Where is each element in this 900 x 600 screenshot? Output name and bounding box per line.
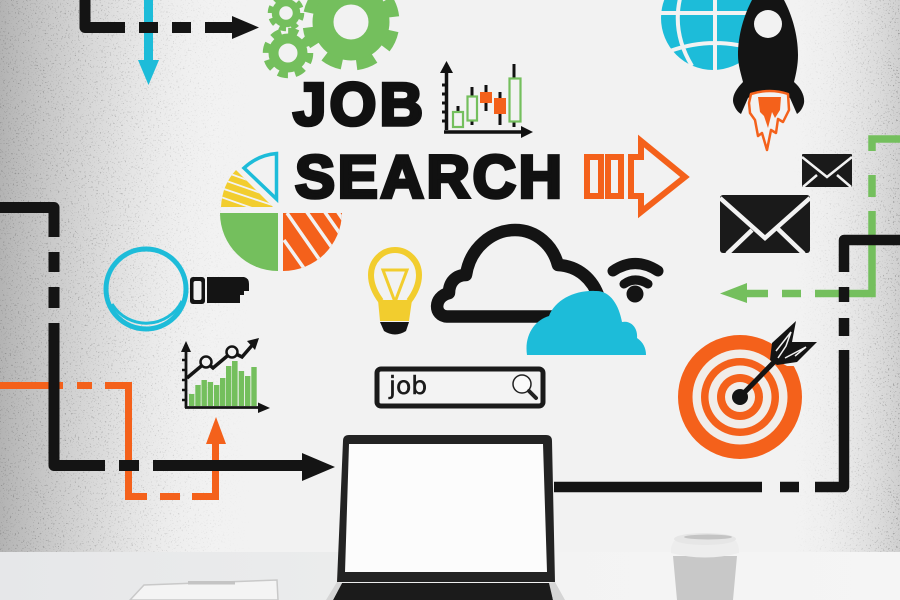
icon: cyan cloud <box>527 291 646 355</box>
title: JOB: JOB <box>293 71 423 138</box>
laptop <box>326 435 565 600</box>
icon: magnifying glass <box>106 249 249 329</box>
icon: large envelope <box>720 195 810 254</box>
arrow: cyan down arrow <box>138 0 159 85</box>
search box <box>377 369 543 406</box>
desk surface <box>0 552 900 600</box>
icon: small envelope <box>802 154 852 187</box>
laptop screen <box>345 444 547 572</box>
icon: orange forward arrow <box>587 141 685 212</box>
pie chart <box>220 152 342 271</box>
icon: outline cloud <box>437 230 599 316</box>
icon: search magnifier <box>513 375 536 398</box>
laptop keyboard <box>333 583 553 600</box>
search box text: job <box>388 371 427 400</box>
arrow: black dashed line from laptop <box>554 240 900 487</box>
arrow: black dashed path to laptop <box>0 208 335 481</box>
icon: globe <box>658 0 768 72</box>
arrow: black dashed path to gears <box>85 0 259 39</box>
icon: light bulb <box>371 250 419 334</box>
title: SEARCH: SEARCH <box>295 144 562 210</box>
bar chart with trend line <box>181 338 270 413</box>
icon: green gears <box>266 0 402 75</box>
arrow: orange dashed path to chart <box>0 386 226 496</box>
icon: wifi signal <box>613 264 658 302</box>
icon: target with arrow <box>678 321 817 459</box>
clipboard on desk <box>130 580 278 600</box>
icon: rocket <box>733 0 804 150</box>
arrow: green dashed path to envelopes <box>720 139 900 303</box>
coffee cup <box>671 533 739 600</box>
candlestick chart <box>440 61 533 138</box>
